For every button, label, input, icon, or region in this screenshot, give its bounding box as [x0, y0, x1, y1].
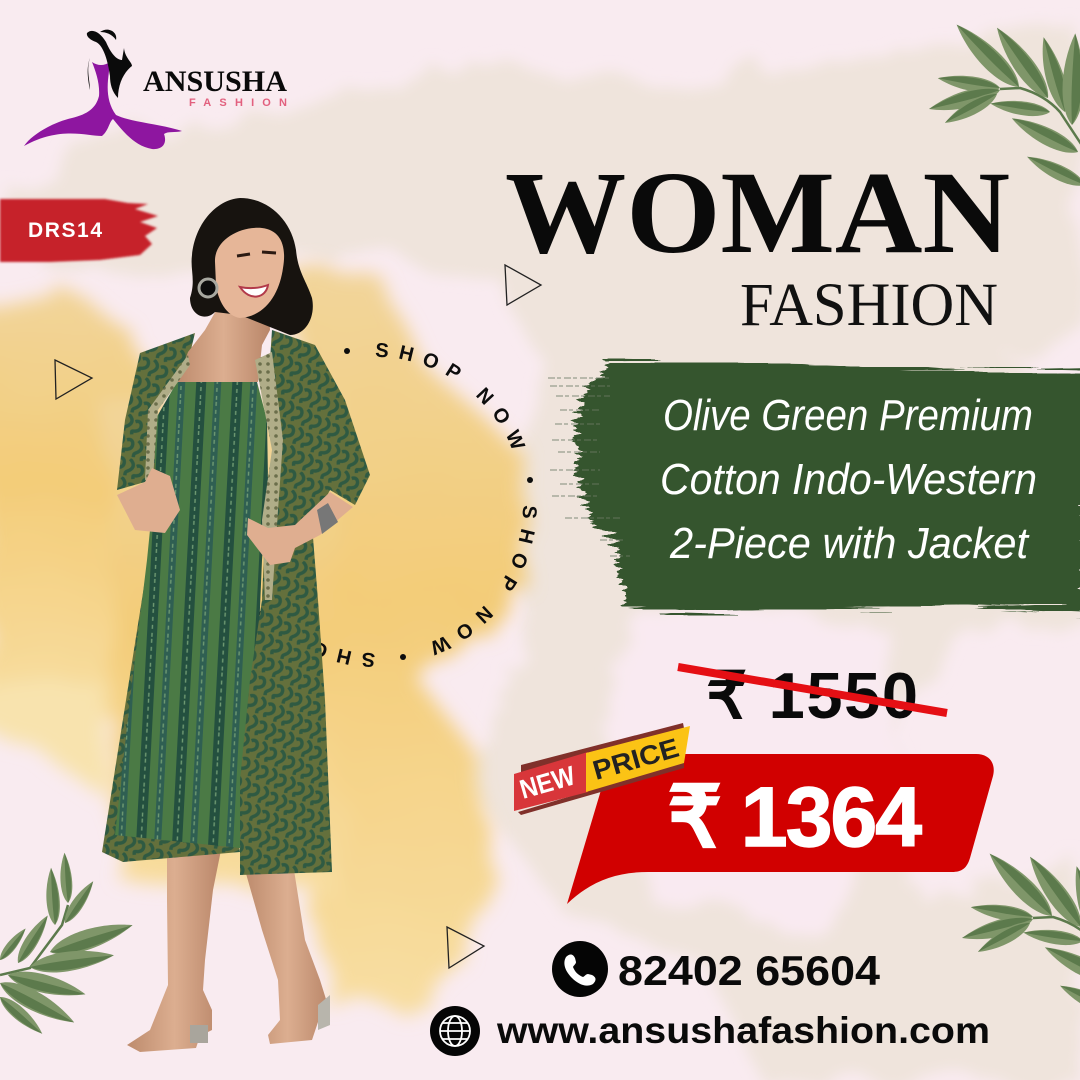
product description	[660, 391, 1037, 568]
old price: ₹ 1550	[706, 659, 918, 732]
main heading: WOMAN	[505, 147, 1010, 278]
model hands	[117, 468, 353, 565]
leaves bottom left	[0, 852, 136, 1038]
decorative triangle bottom	[447, 927, 484, 968]
icon: phone	[552, 941, 608, 997]
new price banner: ₹ 1364	[668, 770, 922, 864]
decorative triangle left	[55, 360, 92, 399]
sub heading: FASHION	[740, 272, 998, 339]
model legs and sandals	[127, 845, 330, 1052]
new price ribbon: NEW	[516, 760, 579, 805]
model smile and eyes	[237, 252, 276, 297]
phone contact	[552, 941, 881, 997]
model photo illustration	[102, 198, 370, 1052]
new price ribbon: PRICE	[589, 733, 682, 786]
website url: www.ansushafashion.com	[496, 1010, 990, 1051]
yellow watercolor wash	[0, 265, 530, 1010]
leaves top right	[927, 18, 1080, 192]
icon: globe	[430, 1006, 480, 1056]
model bracelet	[317, 503, 338, 534]
model hair	[190, 198, 313, 335]
product description: Cotton Indo-Western	[660, 455, 1037, 504]
model chest and neck	[177, 296, 270, 382]
logo	[24, 30, 287, 149]
product code tag	[0, 199, 158, 262]
model earring	[199, 279, 217, 297]
product code tag: DRS14	[28, 219, 102, 242]
circular shop now text: SHOP NOW	[260, 611, 375, 667]
green brush stroke	[548, 360, 1080, 612]
model face	[215, 228, 284, 318]
circular shop now text: SHOP NOW	[376, 343, 526, 448]
decorative triangle top	[505, 265, 541, 305]
model jacket left panel	[102, 333, 240, 862]
jacket trim	[145, 352, 283, 600]
model jacket right panel	[240, 330, 370, 875]
new price banner	[567, 754, 994, 904]
logo subtitle: FASHION	[189, 97, 287, 109]
circular shop now text	[260, 343, 537, 667]
circular shop now text: SHOP NOW	[432, 506, 537, 656]
logo wordmark: ANSUSHA	[143, 65, 287, 98]
phone number: 82402 65604	[618, 947, 881, 994]
model dress	[115, 382, 268, 848]
leaves bottom right	[960, 847, 1080, 1021]
logo: purple gown icon	[24, 30, 182, 149]
website contact	[430, 1006, 990, 1056]
product description: Olive Green Premium	[663, 391, 1033, 440]
product description: 2-Piece with Jacket	[669, 519, 1030, 568]
new price ribbon	[514, 723, 690, 815]
